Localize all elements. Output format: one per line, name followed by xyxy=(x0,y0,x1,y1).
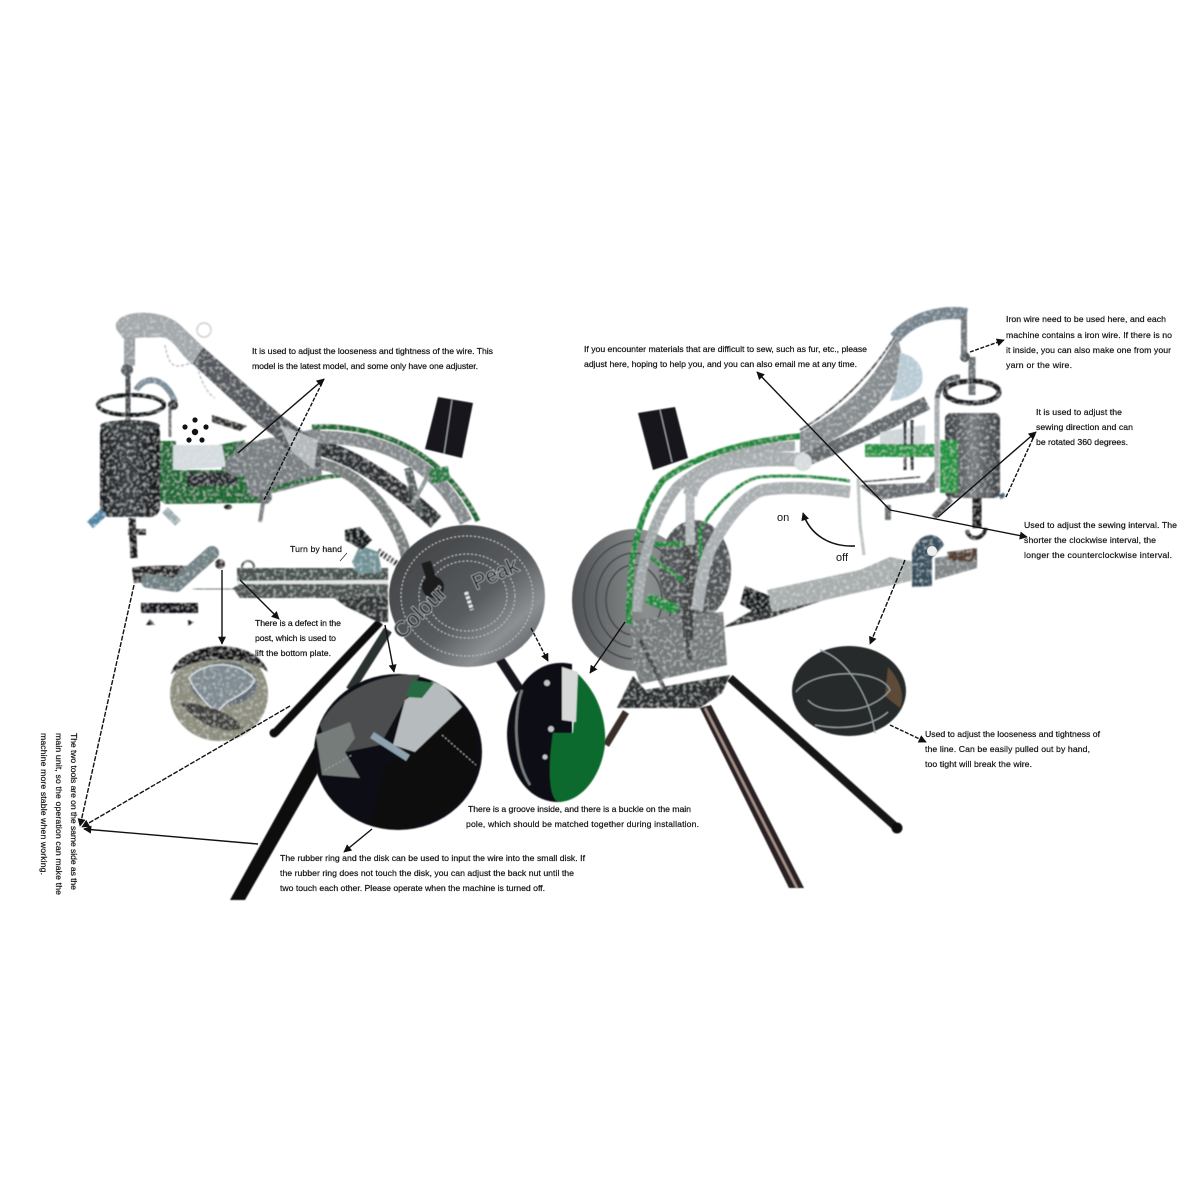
text: groove: There is a groove inside, and there is a buckle on the main xyxy=(468,804,691,814)
brand: Peak: Peak xyxy=(469,554,522,595)
base shadow xyxy=(617,675,730,708)
left sewing machine xyxy=(90,313,478,626)
hook tip xyxy=(967,528,986,538)
right lower arm end xyxy=(935,551,977,580)
callout arrows xyxy=(80,340,1036,852)
disc body xyxy=(389,525,545,667)
left head plate xyxy=(173,445,226,470)
plate arrow right xyxy=(188,620,194,626)
arrow: defect xyxy=(240,580,279,619)
left leg long xyxy=(230,748,328,900)
inset bracket xyxy=(316,722,360,778)
right spool xyxy=(638,407,688,470)
right spool highlight xyxy=(660,410,672,462)
disc centre knob xyxy=(422,576,444,598)
arch green patch xyxy=(428,466,450,484)
text: sewing direction: sewing direction and can xyxy=(1036,422,1133,432)
left inset: bobbin case xyxy=(170,646,268,741)
right arm dark line xyxy=(800,333,897,430)
right machine legs xyxy=(606,678,902,888)
text: tools side note xyxy=(39,733,79,895)
text: sewing interval: longer the counterclockwise interval. xyxy=(1024,550,1172,560)
right leg xyxy=(730,678,897,828)
dial brown edge xyxy=(885,667,902,708)
right inset: bobbin dial xyxy=(792,646,906,736)
case body xyxy=(170,647,268,741)
left plate holes xyxy=(182,417,209,443)
wing screw left xyxy=(934,499,951,517)
loop rod xyxy=(168,408,172,437)
disc knob stud xyxy=(426,562,433,584)
stitch knob xyxy=(885,505,891,520)
left leg steel xyxy=(350,630,388,690)
left head slot xyxy=(187,472,237,487)
blue knob xyxy=(912,535,944,587)
arrow: rubber ring up xyxy=(385,625,394,672)
stitch knob xyxy=(258,490,272,504)
on off lever xyxy=(858,478,864,555)
case centre xyxy=(191,662,257,706)
right disc xyxy=(572,529,696,671)
text: iron wire: machine contains a iron wire. If there is no xyxy=(1006,330,1172,340)
disc ridges xyxy=(401,536,533,656)
joint xyxy=(794,453,812,471)
text: rubber ring: the rubber ring does not touch the disk, you can adjust the back nut until the xyxy=(280,868,574,878)
on label: on xyxy=(777,512,789,524)
bracket rod xyxy=(934,398,940,488)
inset dark upper xyxy=(320,675,420,755)
text: thread tension: the line. Can be easily pulled out by hand, xyxy=(925,744,1090,754)
wing knob xyxy=(740,586,770,617)
right vertical dark xyxy=(688,545,690,640)
arm pivot xyxy=(215,559,225,569)
right head light plate xyxy=(880,425,925,445)
inset body xyxy=(314,674,482,830)
turn knob xyxy=(345,527,372,550)
arrow: rubber ring text xyxy=(344,829,372,852)
line one: The two tools are on the same side as the xyxy=(69,733,79,890)
right lower arm underside xyxy=(722,588,860,628)
plate arrow left xyxy=(146,619,155,625)
text: rubber ring: two touch each other. Please operate when the machine is turned off. xyxy=(280,883,545,893)
text: looseness adjuster: It is used to adjust the looseness and tightness of the wire. This xyxy=(252,346,494,356)
case rim xyxy=(189,665,255,712)
inset dark side xyxy=(370,707,478,829)
text: thread tension: Used to adjust the looseness and tightness of xyxy=(925,729,1101,739)
inset bolt xyxy=(372,735,408,758)
left top arm light cap xyxy=(116,313,203,365)
text: defect: lift the bottom plate. xyxy=(255,648,331,658)
off label: off xyxy=(836,552,849,564)
right top arm xyxy=(800,335,905,453)
right rod xyxy=(961,316,967,355)
text: defect: There is a defect in the xyxy=(255,618,341,628)
right top strap xyxy=(895,313,967,338)
right strut green 3 xyxy=(647,598,678,610)
hand wheel xyxy=(98,395,164,415)
text: looseness adjuster: model is the latest model, and some only have one adjuster. xyxy=(252,361,478,371)
right main arch xyxy=(690,459,803,495)
right vertical grey xyxy=(686,490,694,545)
part plate xyxy=(141,603,198,613)
foot lever xyxy=(148,553,212,585)
arrow: oval to right disc xyxy=(590,622,625,673)
middle leg xyxy=(700,705,804,888)
arrow: sewing interval xyxy=(890,510,1027,537)
text: turn by hand: Turn by hand xyxy=(290,544,342,554)
left outer arch xyxy=(305,437,466,522)
arrow: disc to oval xyxy=(531,628,548,661)
foot dark plate xyxy=(132,566,198,583)
right strut green 1 xyxy=(650,542,684,546)
wire loop xyxy=(136,380,175,402)
arm ring xyxy=(242,561,254,573)
left lower arch xyxy=(300,462,408,565)
right head grey lower xyxy=(858,470,935,500)
wing screw left xyxy=(90,512,104,525)
right green outer xyxy=(629,436,802,625)
inset green accent xyxy=(406,680,434,698)
right cylinder xyxy=(945,413,1000,498)
on/off curve arrow xyxy=(803,513,855,546)
big inset: rubber ring and disk xyxy=(314,674,482,830)
arrow: adjuster two xyxy=(264,379,324,500)
oval green half xyxy=(550,673,605,802)
arrow: tool three xyxy=(84,829,258,844)
dial body xyxy=(792,646,906,736)
cylinder top xyxy=(100,420,160,432)
right disc rings xyxy=(584,541,684,659)
brand: Colour: Colour xyxy=(388,580,451,644)
left dark arch xyxy=(285,440,436,522)
oval rim highlight xyxy=(516,690,530,785)
base body xyxy=(630,612,727,684)
right hand wheel xyxy=(945,381,999,403)
oval white part xyxy=(562,667,578,722)
stand bracket xyxy=(937,377,960,400)
inset metal panel xyxy=(393,682,462,752)
left spool xyxy=(425,397,473,458)
thread guide wire xyxy=(165,345,215,398)
arrow: direction two xyxy=(1006,434,1035,497)
left leg rear xyxy=(497,655,520,690)
right strut green 2 xyxy=(650,557,684,581)
loop knob xyxy=(168,400,178,410)
arrow: bobbin case xyxy=(221,570,223,644)
oval studs xyxy=(542,680,554,760)
arrow: direction one xyxy=(938,432,1036,517)
left leg short xyxy=(275,622,380,733)
head green line xyxy=(262,475,345,495)
left head green frame xyxy=(153,441,270,504)
left green arc xyxy=(312,427,478,521)
presser hook xyxy=(132,518,134,558)
right head spring xyxy=(905,420,912,445)
head spring lower xyxy=(905,457,912,470)
text: sewing interval: shorter the clockwise interval, the xyxy=(1024,535,1156,545)
turn knob base xyxy=(352,545,382,574)
arrow: adjuster one xyxy=(238,379,324,453)
middle leg shine xyxy=(705,708,797,888)
strut brace xyxy=(412,472,430,505)
arrow: right dial xyxy=(870,560,905,644)
lower arm light xyxy=(237,580,388,585)
knob thread xyxy=(378,551,400,566)
head green upper xyxy=(218,440,245,470)
left struts xyxy=(408,468,420,515)
tension lever xyxy=(212,415,247,431)
inset highlights xyxy=(325,735,476,770)
lower arm underside xyxy=(333,597,388,622)
left disc xyxy=(388,525,545,667)
adjuster knob xyxy=(225,453,249,477)
left leg tip xyxy=(270,728,278,738)
text: iron wire: it inside, you can also make one from your xyxy=(1006,345,1171,355)
case top shadow xyxy=(171,646,268,674)
arrow: tool one xyxy=(80,585,134,826)
text: difficult materials: adjust here, hoping to help you, and you can also email me at any time. xyxy=(584,359,857,369)
foot stud xyxy=(224,504,232,510)
arrow: turn by hand xyxy=(340,553,347,561)
left cylinder xyxy=(100,423,160,517)
right green plate xyxy=(940,440,958,493)
rod collar xyxy=(960,352,970,362)
right grey arch xyxy=(637,446,795,612)
hook collar xyxy=(128,529,146,535)
disc body xyxy=(572,529,696,671)
dial lines xyxy=(796,650,890,733)
right crossbar xyxy=(800,403,927,462)
left machine legs xyxy=(230,397,688,900)
left needle rod xyxy=(126,366,130,424)
text: difficult materials: If you encounter materials that are difficult to sew, such as fur, etc., please xyxy=(584,344,867,354)
arm tip xyxy=(947,548,977,563)
thread ring xyxy=(197,323,211,337)
text: iron wire: Iron wire need to be used here, and each xyxy=(1006,314,1166,324)
wing screw right xyxy=(165,510,178,523)
arrow: tool two xyxy=(82,706,290,827)
left needle rod upper xyxy=(124,338,135,366)
arm joint bright xyxy=(280,425,318,470)
text: sewing direction: be rotated 360 degrees. xyxy=(1036,437,1128,447)
line two: main unit, so the operation can make the xyxy=(54,733,64,895)
base strut xyxy=(640,612,690,690)
knob face xyxy=(927,546,937,556)
right hook xyxy=(972,498,982,528)
lower arm body xyxy=(233,584,388,598)
right lower green xyxy=(700,476,850,530)
case lower xyxy=(180,703,244,730)
lower arm stripe xyxy=(193,588,235,590)
text: iron wire: yarn or the wire. xyxy=(1006,360,1072,370)
left short leg xyxy=(606,712,626,745)
arrow: iron wire xyxy=(970,340,1004,352)
center inset: green half oval xyxy=(507,663,605,802)
right crescent xyxy=(890,353,923,401)
right sewing machine xyxy=(617,313,1003,708)
head dark line xyxy=(860,477,920,482)
rod collar xyxy=(121,364,133,376)
arrow: fur adjuster xyxy=(757,372,890,510)
lower arm top xyxy=(237,568,388,581)
right lower arm xyxy=(767,557,915,612)
stitch needle xyxy=(260,503,263,522)
right green bar xyxy=(865,444,937,457)
wing screw right xyxy=(1001,494,1003,498)
head silver knot xyxy=(235,428,322,497)
text: groove: pole, which should be matched together during installation. xyxy=(466,819,699,829)
disc centre highlight xyxy=(466,592,472,610)
text: sewing interval: Used to adjust the sewing interval. The xyxy=(1024,520,1177,530)
line three: machine more stable when working. xyxy=(39,733,49,875)
oval dark half xyxy=(507,663,572,802)
text: defect: post, which is used to xyxy=(255,633,336,643)
text: thread tension: too tight will break the wire. xyxy=(925,759,1032,769)
left spool highlight xyxy=(444,400,452,454)
right lower arch xyxy=(697,488,850,610)
hub behind frame xyxy=(659,520,731,620)
text: rubber ring: The rubber ring and the disk can be used to input the wire into the small disk. If xyxy=(280,853,586,863)
annotation texts xyxy=(39,314,1177,895)
right leg tip xyxy=(892,822,902,834)
arrow: right dial text xyxy=(890,725,926,742)
left top arm xyxy=(116,313,322,470)
text: sewing direction: It is used to adjust the xyxy=(1036,407,1122,417)
right strut green 4 xyxy=(700,530,702,605)
rod lower xyxy=(968,357,976,395)
